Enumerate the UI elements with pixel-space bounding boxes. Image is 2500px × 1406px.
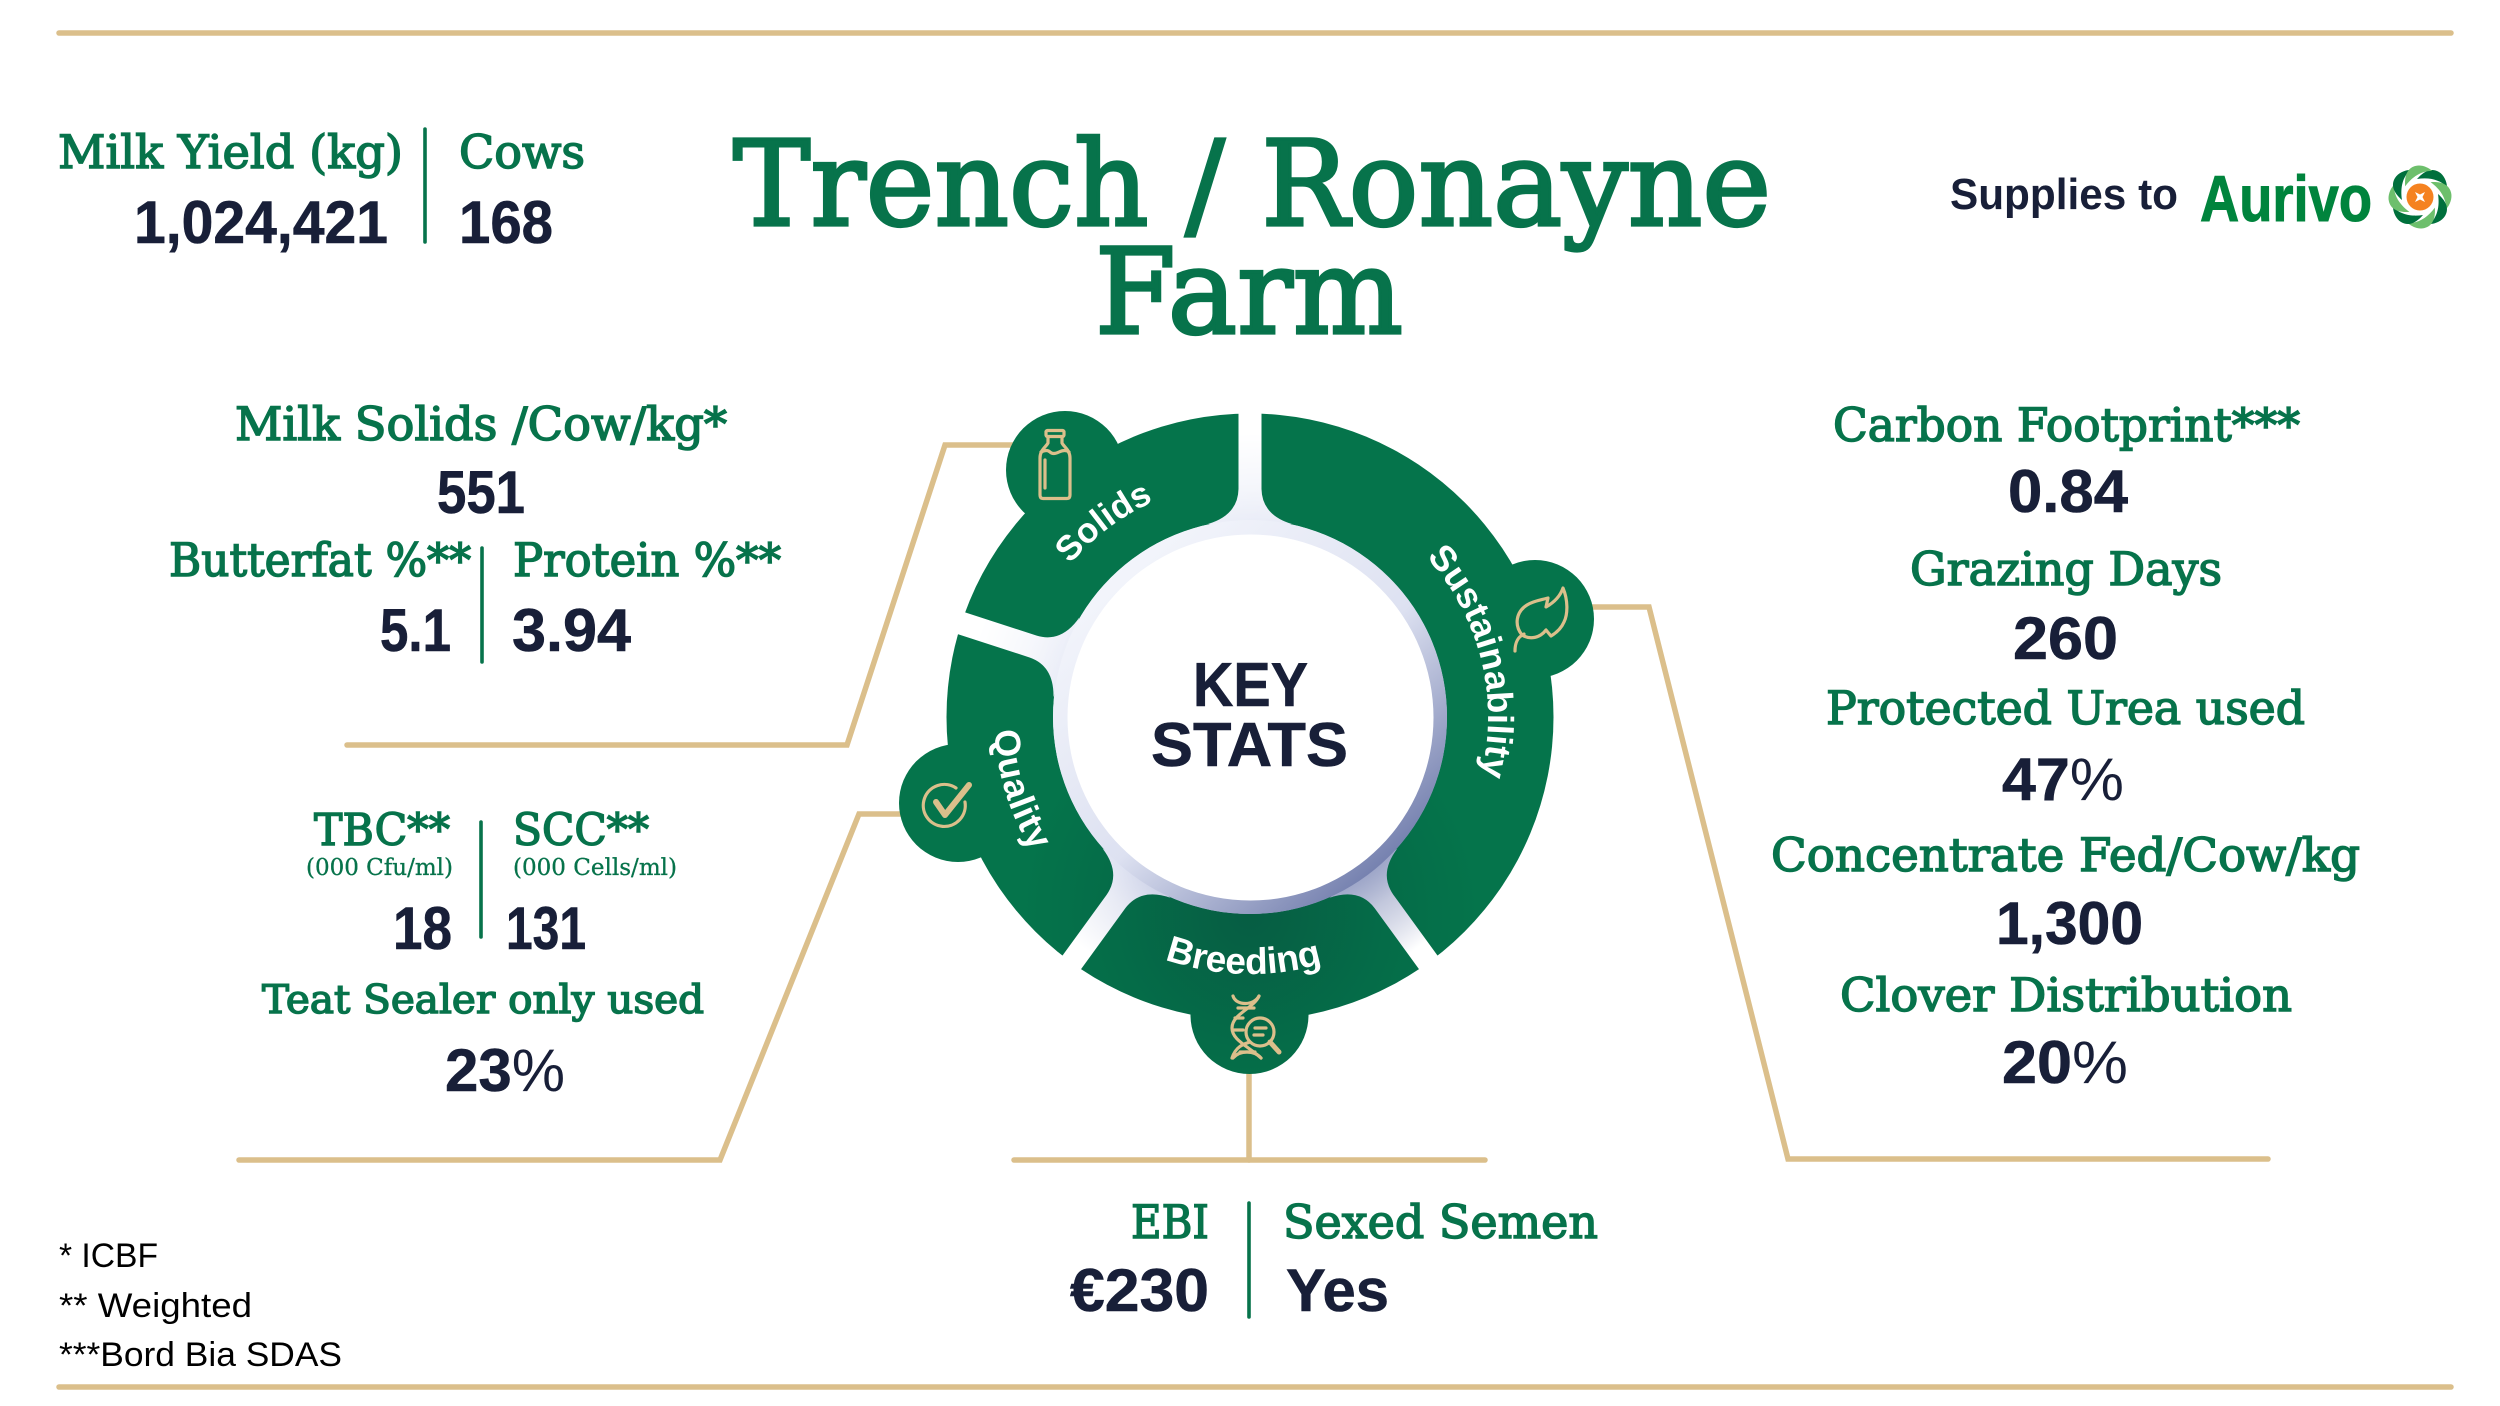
stats: milk yield and cows: Milk Yield (kg) — [58, 125, 403, 179]
stats: milk yield and cows: 168 — [459, 189, 553, 256]
stats: breeding panel: Yes — [1286, 1257, 1389, 1324]
stats: quality panel: SCC** — [513, 805, 649, 856]
title: Trench / Ronayne — [733, 115, 1771, 253]
segment label: Quality: Quality — [989, 730, 1048, 846]
icon: Aurivo logo — [2382, 159, 2458, 235]
connector: solids — [347, 445, 1030, 745]
supplies to Aurivo: Supplies to — [1950, 170, 2178, 219]
stats: solids panel — [169, 397, 781, 664]
stats: solids panel: Butterfat %** — [169, 533, 471, 587]
stats: breeding panel: €230 — [1070, 1257, 1209, 1324]
stats: sustainability panel: Carbon Footprint*** — [1833, 398, 2300, 452]
top rule — [59, 30, 2451, 36]
connector: sustainability — [1590, 607, 2268, 1159]
supplies to Aurivo: Aurivo — [2200, 162, 2372, 235]
bottom rule — [59, 1384, 2451, 1390]
title: Farm — [1095, 223, 1403, 361]
footnotes: * ICBF — [59, 1237, 158, 1275]
stats: quality panel: 23% — [445, 1037, 565, 1104]
green ring segments with icon tabs — [899, 411, 1594, 1074]
stats: breeding panel: EBI — [1131, 1195, 1209, 1249]
connector: quality — [239, 814, 920, 1160]
stats: milk yield and cows: 1,024,421 — [134, 189, 388, 256]
stats: sustainability panel: 0.84 — [2008, 458, 2129, 525]
stats: sustainability panel: Concentrate Fed/Cow/kg — [1771, 828, 2360, 882]
stats: milk yield and cows — [58, 125, 585, 256]
stats: solids panel: 5.1 — [380, 597, 451, 664]
stats: solids panel: 3.94 — [512, 597, 632, 664]
stats: sustainability panel: 20% — [2002, 1029, 2128, 1096]
icon: DNA and magnifier — [1232, 996, 1279, 1058]
icon: milk bottle — [1040, 430, 1070, 498]
stats: quality panel: 131 — [506, 895, 586, 962]
stats: solids panel: Protein %** — [513, 533, 781, 587]
hub — [1068, 534, 1434, 900]
segment label: Breeding: Breeding — [1166, 936, 1320, 975]
stats: quality panel: (000 Cfu/ml) — [306, 855, 453, 881]
stats: sustainability panel: Clover Distribution — [1840, 968, 2292, 1022]
wheel: key stats ring — [899, 411, 1594, 1074]
connector: breeding — [1014, 1060, 1485, 1160]
stats: quality panel: (000 Cells/ml) — [513, 855, 677, 881]
stats: quality panel: TBC** — [314, 805, 450, 856]
icon: leaf — [1515, 588, 1567, 651]
stats: sustainability panel: 1,300 — [1996, 890, 2143, 957]
hub text: STATS — [1151, 711, 1348, 780]
stats: quality panel: Teat Sealer only used — [262, 978, 704, 1023]
footnotes — [59, 1237, 342, 1374]
supplies to Aurivo — [1950, 159, 2458, 235]
stats: solids panel: 551 — [437, 459, 525, 526]
stats: milk yield and cows: Cows — [459, 125, 585, 179]
hub text — [1151, 651, 1348, 780]
stats: breeding panel — [1070, 1195, 1598, 1324]
hub halo — [1053, 520, 1447, 914]
footnotes: ***Bord Bia SDAS — [59, 1336, 342, 1374]
segment label: Solids: Solids — [1056, 488, 1150, 560]
stats: breeding panel: Sexed Semen — [1283, 1195, 1598, 1249]
icon: check mark — [923, 784, 969, 826]
stats: quality panel: 18 — [393, 895, 452, 962]
stats: sustainability panel: 260 — [2013, 605, 2118, 672]
stats: sustainability panel: Grazing Days — [1910, 542, 2222, 596]
footnotes: ** Weighted — [59, 1287, 252, 1325]
title — [733, 115, 1771, 361]
stats: quality panel — [262, 805, 704, 1104]
stats: sustainability panel — [1771, 398, 2360, 1096]
hub text: KEY — [1193, 651, 1308, 720]
stats: solids panel: Milk Solids /Cow/kg* — [235, 397, 727, 451]
soft shadow around hub — [1022, 478, 1447, 948]
stats: sustainability panel: Protected Urea used — [1826, 681, 2305, 735]
stats: sustainability panel: 47% — [2002, 746, 2124, 813]
segment label: Sustainability: Sustainability — [1430, 546, 1514, 780]
